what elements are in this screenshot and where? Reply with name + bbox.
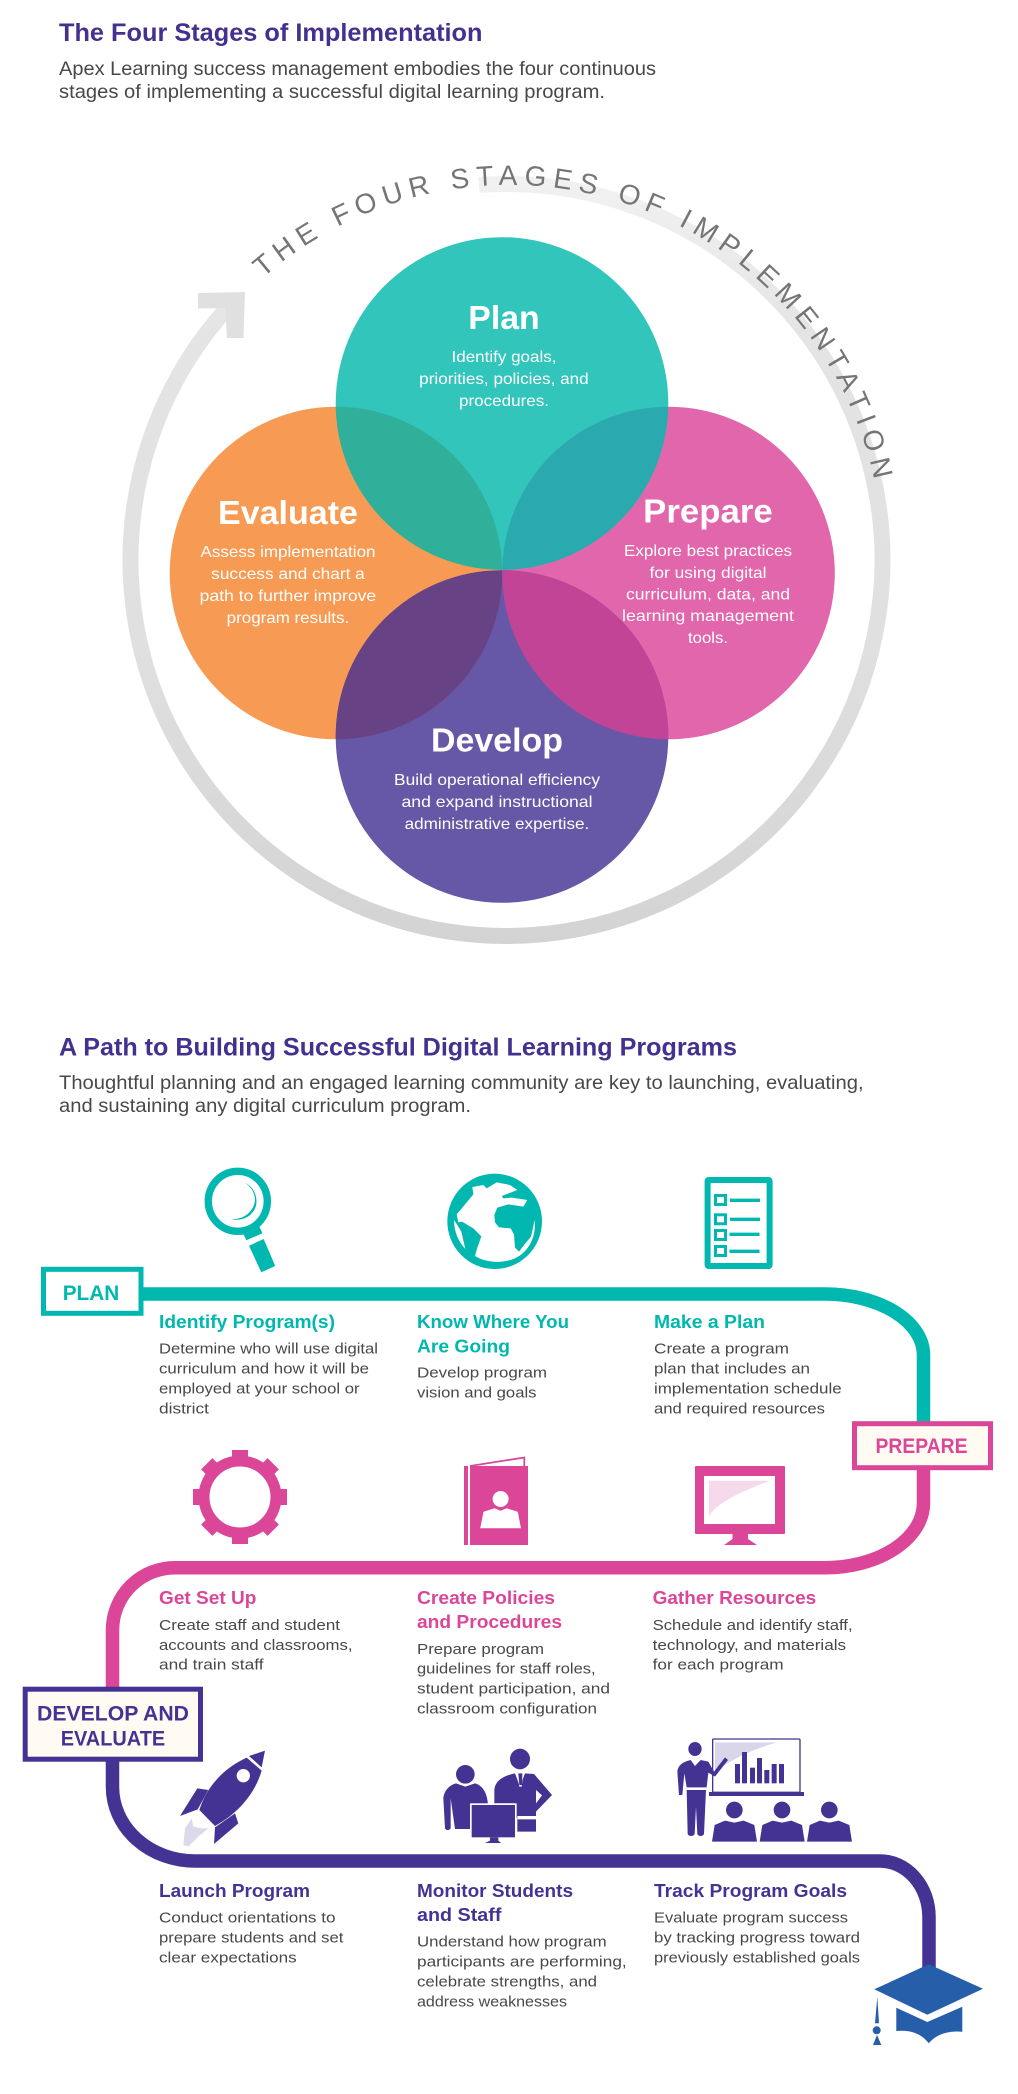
icon: presenter with chart and audience bbox=[677, 1739, 852, 1842]
step: identify programs: employed at your school or bbox=[159, 1380, 360, 1397]
text: plan: procedures. bbox=[459, 393, 549, 410]
text: prepare: Prepare bbox=[643, 493, 773, 530]
icon: rocket bbox=[180, 1751, 265, 1847]
step: create policies and procedures bbox=[417, 1587, 610, 1718]
text: evaluate: success and chart a bbox=[211, 566, 365, 583]
step: make a plan bbox=[654, 1311, 842, 1417]
step: launch program: clear expectations bbox=[159, 1950, 297, 1967]
step: make a plan: implementation schedule bbox=[654, 1380, 842, 1397]
venn diagram bbox=[170, 237, 835, 903]
step: know where you are going: vision and goals bbox=[417, 1385, 537, 1402]
step: create policies and procedures: classroom configuration bbox=[417, 1700, 597, 1718]
step: know where you are going bbox=[417, 1311, 569, 1402]
step: track program goals: Evaluate program success bbox=[654, 1910, 848, 1927]
step: identify programs: district bbox=[159, 1400, 210, 1417]
step: monitor students and staff: participants are performing, bbox=[417, 1954, 627, 1971]
label: develop and evaluate: EVALUATE bbox=[61, 1728, 165, 1751]
step: create policies and procedures: student participation, and bbox=[417, 1680, 610, 1698]
step: gather resources: technology, and materials bbox=[653, 1637, 847, 1654]
step: identify programs bbox=[159, 1311, 378, 1417]
icon: gear bbox=[193, 1450, 287, 1544]
step: make a plan: Create a program bbox=[654, 1340, 789, 1357]
step: get set up: accounts and classrooms, bbox=[159, 1637, 352, 1654]
step: launch program: Conduct orientations to bbox=[159, 1910, 336, 1927]
step: track program goals: by tracking progress toward bbox=[654, 1930, 860, 1947]
icon: monitor bbox=[695, 1466, 785, 1545]
text: develop: Build operational efficiency bbox=[394, 772, 600, 789]
text: develop: administrative expertise. bbox=[405, 816, 589, 833]
text: evaluate: path to further improve bbox=[200, 588, 376, 605]
step: create policies and procedures: Prepare program bbox=[417, 1641, 544, 1658]
step: gather resources: Gather Resources bbox=[653, 1587, 816, 1608]
label: prepare: PREPARE bbox=[876, 1435, 968, 1458]
intro text: four stages bbox=[59, 58, 656, 103]
text: prepare: tools. bbox=[688, 630, 728, 647]
step: track program goals: previously established goals bbox=[654, 1950, 860, 1967]
text: prepare: for using digital bbox=[650, 565, 766, 582]
icon: checklist bbox=[708, 1180, 770, 1266]
step: track program goals: Track Program Goals bbox=[654, 1880, 847, 1901]
text: prepare bbox=[622, 493, 795, 647]
label: prepare bbox=[854, 1424, 990, 1468]
step: get set up: and train staff bbox=[159, 1656, 264, 1674]
text: develop bbox=[394, 722, 600, 833]
overlap: evaluate and develop bbox=[336, 570, 502, 740]
intro text: four stages: Apex Learning success management embodies the four continuous bbox=[59, 58, 656, 80]
text: plan: Identify goals, bbox=[452, 349, 556, 366]
step: identify programs: Identify Program(s) bbox=[159, 1311, 335, 1332]
text: evaluate: Evaluate bbox=[218, 494, 358, 531]
text: plan bbox=[419, 299, 589, 410]
step: make a plan: and required resources bbox=[654, 1400, 825, 1417]
step: monitor students and staff: celebrate strengths, and bbox=[417, 1974, 597, 1991]
text: plan: Plan bbox=[468, 299, 540, 336]
step: identify programs: curriculum and how it will be bbox=[159, 1360, 369, 1377]
label: develop and evaluate: DEVELOP AND bbox=[37, 1703, 189, 1726]
step: get set up bbox=[159, 1587, 352, 1674]
text: prepare: curriculum, data, and bbox=[626, 586, 790, 604]
title: four stages: The Four Stages of Implementation bbox=[59, 19, 483, 47]
overlap: plan and prepare bbox=[502, 406, 668, 570]
step: make a plan: plan that includes an bbox=[654, 1360, 810, 1377]
step: know where you are going: Know Where You bbox=[417, 1311, 569, 1332]
step: monitor students and staff: Monitor Students bbox=[417, 1880, 573, 1901]
step: make a plan: Make a Plan bbox=[654, 1311, 765, 1332]
text: evaluate bbox=[200, 494, 376, 627]
text: evaluate: Assess implementation bbox=[200, 544, 376, 561]
text: prepare: Explore best practices bbox=[624, 543, 792, 560]
circle: evaluate bbox=[170, 407, 502, 739]
text: evaluate: program results. bbox=[227, 610, 349, 627]
step: monitor students and staff bbox=[417, 1880, 627, 2011]
label: plan: PLAN bbox=[63, 1282, 119, 1305]
step: create policies and procedures: Create Policies bbox=[417, 1587, 555, 1608]
step: know where you are going: Develop program bbox=[417, 1365, 547, 1382]
step: monitor students and staff: Understand how program bbox=[417, 1934, 607, 1951]
text: prepare: learning management bbox=[622, 608, 795, 625]
intro text: four stages: stages of implementing a successful digital learning program. bbox=[59, 81, 605, 103]
icon: handbook bbox=[464, 1458, 528, 1545]
icon: magnifying glass bbox=[208, 1171, 275, 1272]
path line: plan bbox=[143, 1294, 924, 1422]
circle: prepare bbox=[502, 407, 835, 739]
intro text: path bbox=[59, 1072, 864, 1117]
text: plan: priorities, policies, and bbox=[419, 371, 589, 388]
circle: develop bbox=[336, 570, 668, 903]
path line: develop and evaluate bbox=[112, 1761, 929, 1972]
step: monitor students and staff: and Staff bbox=[417, 1904, 502, 1925]
step: create policies and procedures: and Procedures bbox=[417, 1611, 562, 1632]
label: develop and evaluate bbox=[25, 1689, 201, 1759]
step: gather resources bbox=[653, 1587, 853, 1674]
icon: staff and student with monitor bbox=[443, 1749, 552, 1843]
step: gather resources: for each program bbox=[653, 1656, 784, 1674]
step: launch program: prepare students and set bbox=[159, 1930, 344, 1947]
circle: plan bbox=[336, 237, 668, 570]
step: get set up: Create staff and student bbox=[159, 1617, 341, 1634]
icon: globe bbox=[447, 1174, 542, 1269]
step: create policies and procedures: guidelines for staff roles, bbox=[417, 1660, 596, 1678]
intro text: path: and sustaining any digital curriculum program. bbox=[59, 1095, 471, 1117]
step: track program goals bbox=[654, 1880, 860, 1967]
curved label: THE FOUR STAGES OF IMPLEMENTATION bbox=[251, 166, 892, 478]
step: get set up: Get Set Up bbox=[159, 1587, 256, 1608]
intro text: path: Thoughtful planning and an engaged learning community are key to launching, evaluating, bbox=[59, 1072, 864, 1094]
step: gather resources: Schedule and identify staff, bbox=[653, 1617, 853, 1634]
path line: prepare bbox=[112, 1470, 924, 1688]
step: know where you are going: Are Going bbox=[417, 1335, 510, 1356]
step: launch program bbox=[159, 1880, 344, 1967]
step: launch program: Launch Program bbox=[159, 1880, 310, 1901]
text: develop: Develop bbox=[431, 722, 563, 759]
icon: graduation cap bbox=[873, 1964, 983, 2045]
circular arrow ring bbox=[130, 184, 882, 936]
overlap: plan and evaluate bbox=[336, 406, 502, 570]
overlap: prepare and develop bbox=[502, 570, 668, 740]
step: monitor students and staff: address weaknesses bbox=[417, 1994, 567, 2011]
step: identify programs: Determine who will use digital bbox=[159, 1340, 378, 1357]
text: develop: and expand instructional bbox=[402, 794, 592, 811]
label: plan bbox=[44, 1269, 141, 1313]
title: path: A Path to Building Successful Digital Learning Programs bbox=[59, 1034, 737, 1062]
